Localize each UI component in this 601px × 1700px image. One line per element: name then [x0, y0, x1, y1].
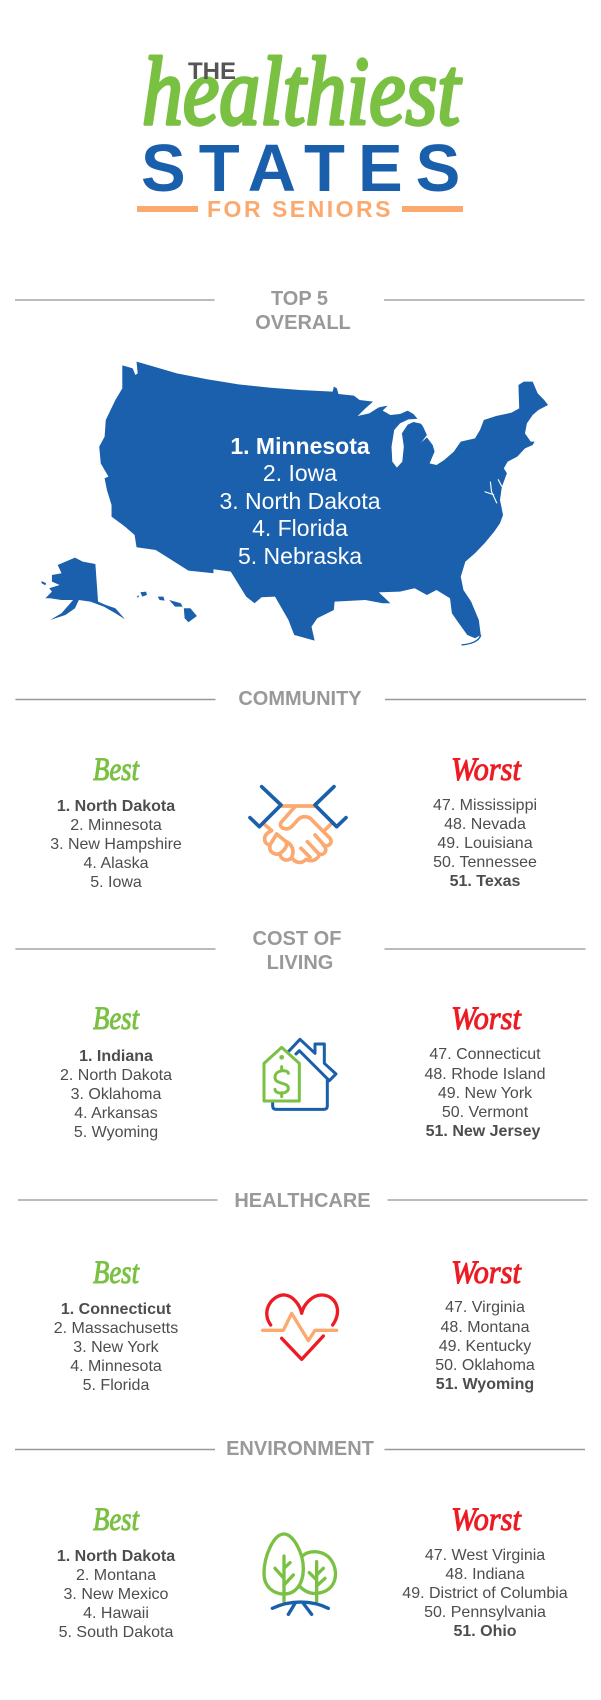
heading: cost of living: LIVING [267, 952, 333, 974]
icon: heart with pulse [263, 1295, 338, 1359]
list: worst community: 50. Tennessee [433, 854, 537, 871]
title word: THE: THE [188, 58, 236, 85]
list: worst healthcare: 51. Wyoming [436, 1376, 534, 1393]
panel: healthcare [18, 1190, 588, 1394]
map list: top 5 states [219, 433, 381, 569]
map list: top 5 states: 2. Iowa [263, 460, 337, 486]
list: worst environment: 51. Ohio [453, 1623, 517, 1640]
panel: community [15, 688, 586, 891]
label: worst: Worst [451, 1255, 522, 1291]
list: worst cost of living: 48. Rhode Island [425, 1066, 545, 1083]
list: best community: 4. Alaska [84, 855, 149, 872]
heading: cost of living: COST OF [253, 928, 341, 950]
list: best cost of living: 2. North Dakota [60, 1067, 172, 1084]
list: best environment: 1. North Dakota [57, 1548, 175, 1565]
heading: top 5 overall [15, 288, 584, 334]
list: worst community: 48. Nevada [444, 816, 526, 833]
subtitle: for seniors: FOR SENIORS [207, 196, 393, 222]
heading: cost of living [15, 928, 585, 974]
list: best community [50, 798, 182, 891]
label: best: Best [93, 1502, 140, 1538]
list: best cost of living: 4. Arkansas [74, 1105, 158, 1122]
label: worst: Worst [451, 752, 522, 788]
heading: community: COMMUNITY [238, 688, 362, 710]
map: Chesapeake and Delaware bays [485, 479, 502, 503]
list: worst cost of living: 51. New Jersey [426, 1123, 540, 1140]
panel: top 5 overall [15, 288, 584, 645]
list: worst cost of living: 47. Connecticut [429, 1046, 541, 1063]
list: worst healthcare: 47. Virginia [445, 1299, 525, 1316]
list: best healthcare: 1. Connecticut [61, 1301, 172, 1318]
label: worst: Worst [451, 1502, 522, 1538]
list: best community: 1. North Dakota [57, 798, 175, 815]
list: best community: 5. Iowa [90, 874, 142, 891]
list: worst environment [402, 1547, 568, 1640]
list: worst community: 49. Louisiana [437, 835, 533, 852]
map: United States [42, 362, 548, 645]
title [137, 38, 473, 222]
list: best environment: 5. South Dakota [59, 1624, 173, 1641]
icon: trees [264, 1534, 335, 1614]
list: worst environment: 49. District of Columbia [402, 1585, 568, 1602]
list: best community: 2. Minnesota [70, 817, 162, 834]
list: worst healthcare [435, 1299, 535, 1393]
heading: environment: ENVIRONMENT [226, 1438, 374, 1460]
list: best healthcare [54, 1301, 178, 1394]
label: best: Best [93, 1001, 140, 1037]
title word: STATES: STATES [141, 131, 473, 206]
map list: top 5 states: 5. Nebraska [238, 543, 362, 569]
list: best environment: 2. Montana [76, 1567, 156, 1584]
list: best healthcare: 2. Massachusetts [54, 1320, 178, 1337]
label: worst: Worst [451, 1001, 522, 1037]
map: Lake Michigan [392, 419, 422, 468]
list: best healthcare: 5. Florida [83, 1377, 149, 1394]
label: best: Best [93, 1255, 140, 1291]
list: worst healthcare: 49. Kentucky [439, 1338, 531, 1355]
title script word: healthiest: healthiest [142, 38, 462, 145]
label: best: Best [93, 752, 140, 788]
list: worst environment: 48. Indiana [445, 1566, 525, 1583]
list: worst community: 47. Mississippi [433, 797, 537, 814]
heading: top 5 overall: OVERALL [255, 312, 351, 334]
list: best cost of living: 5. Wyoming [74, 1124, 158, 1141]
list: best healthcare: 4. Minnesota [70, 1358, 162, 1375]
list: worst environment: 47. West Virginia [425, 1547, 545, 1564]
list: worst cost of living [425, 1046, 545, 1140]
list: best environment [57, 1548, 175, 1641]
list: worst healthcare: 50. Oklahoma [435, 1357, 535, 1374]
list: best community: 3. New Hampshire [50, 836, 182, 853]
icon: house with price tag [264, 1039, 336, 1109]
list: worst community [433, 797, 537, 890]
list: worst community: 51. Texas [450, 873, 521, 890]
panel: environment [15, 1438, 585, 1641]
map: Florida Keys [462, 635, 481, 645]
list: best cost of living: 1. Indiana [79, 1048, 153, 1065]
map: Alaska [42, 558, 125, 620]
heading: healthcare: HEALTHCARE [234, 1190, 371, 1212]
subtitle bar right [402, 206, 463, 212]
list: best cost of living [60, 1048, 172, 1141]
map: Hawaii [137, 592, 197, 622]
map: contiguous states [99, 362, 548, 641]
list: best environment: 4. Hawaii [83, 1605, 149, 1622]
list: worst cost of living: 50. Vermont [442, 1104, 529, 1121]
map list: top 5 states: 3. North Dakota [219, 488, 381, 514]
map list: top 5 states: 1. Minnesota [230, 433, 370, 459]
map list: top 5 states: 4. Florida [252, 515, 348, 541]
list: best healthcare: 3. New York [73, 1339, 160, 1356]
heading: top 5 overall: TOP 5 [271, 288, 328, 310]
list: best environment: 3. New Mexico [64, 1586, 169, 1603]
list: worst cost of living: 49. New York [438, 1085, 533, 1102]
list: worst healthcare: 48. Montana [441, 1319, 530, 1336]
subtitle bar left [137, 206, 198, 212]
panel: cost of living [15, 928, 585, 1141]
list: worst environment: 50. Pennsylvania [424, 1604, 546, 1621]
list: best cost of living: 3. Oklahoma [71, 1086, 161, 1103]
icon: handshake [250, 787, 346, 862]
